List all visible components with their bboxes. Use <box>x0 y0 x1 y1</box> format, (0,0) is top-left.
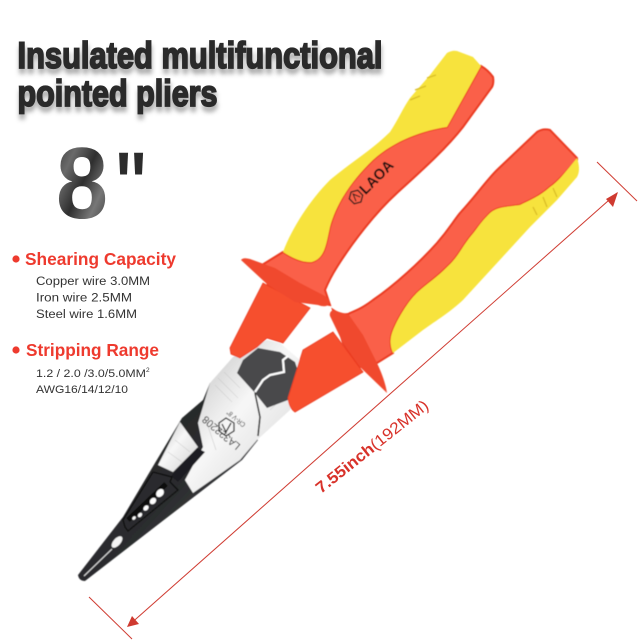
brand mark: LAOA <box>356 157 397 198</box>
dimension arrow <box>89 162 637 639</box>
engraved logo <box>219 418 234 436</box>
lower ridges <box>533 188 557 215</box>
upper flange <box>241 258 330 306</box>
title: pointed pliers <box>18 77 218 119</box>
brushed streaks <box>168 372 296 462</box>
upper neck <box>230 283 310 358</box>
title: Insulated multifunctional <box>18 34 382 76</box>
stripping range block: Stripping Range <box>26 340 159 360</box>
jaw serration <box>255 393 260 436</box>
lower neck <box>288 332 363 412</box>
metal head and nose <box>78 340 307 581</box>
shearing capacity block: Shearing Capacity <box>25 249 176 269</box>
lower red grip <box>333 129 577 367</box>
upper ridges <box>410 75 436 100</box>
engraved CR-V mark: CR-V 8" <box>226 408 247 428</box>
stripper window <box>123 472 178 531</box>
size heading: 8 inch: 8 <box>56 128 108 240</box>
stripping range block: 1.2 / 2.0 /3.0/5.0MM <box>36 368 146 380</box>
upper handle <box>230 51 493 358</box>
dimension label: 7.55inch(192MM) <box>313 397 432 497</box>
jaw slit <box>255 356 288 392</box>
silver body <box>185 340 307 493</box>
black channel <box>171 448 205 482</box>
title: Insulated multifunctional <box>18 39 383 81</box>
engraved model number: LA322208 <box>200 413 243 452</box>
title <box>18 34 383 119</box>
title: pointed pliers <box>18 72 218 114</box>
lower yellow grip <box>390 158 579 353</box>
stripper slot <box>128 484 166 520</box>
brand mark <box>346 157 397 208</box>
lower flange <box>330 310 387 393</box>
shearing capacity block <box>12 249 176 321</box>
shearing capacity block: Steel wire 1.6MM <box>36 309 137 321</box>
stripping holes <box>132 487 166 520</box>
shearing capacity block: Copper wire 3.0MM <box>36 276 150 288</box>
upper red grip <box>262 66 493 305</box>
black nose <box>78 383 258 581</box>
crimping jaw <box>237 348 302 408</box>
stripping range block: AWG16/14/12/10 <box>36 384 128 396</box>
lower handle <box>288 129 579 412</box>
size heading: 8 inch: '' <box>114 132 148 244</box>
silver upper panel <box>158 422 198 472</box>
stripping range block <box>12 340 159 396</box>
pliers <box>78 51 579 581</box>
upper yellow grip <box>283 51 481 262</box>
size heading: 8 inch <box>56 128 148 244</box>
shearing capacity block: Iron wire 2.5MM <box>36 292 132 304</box>
tip hole and slit <box>84 534 124 576</box>
stripping range block: 2 <box>146 367 150 374</box>
